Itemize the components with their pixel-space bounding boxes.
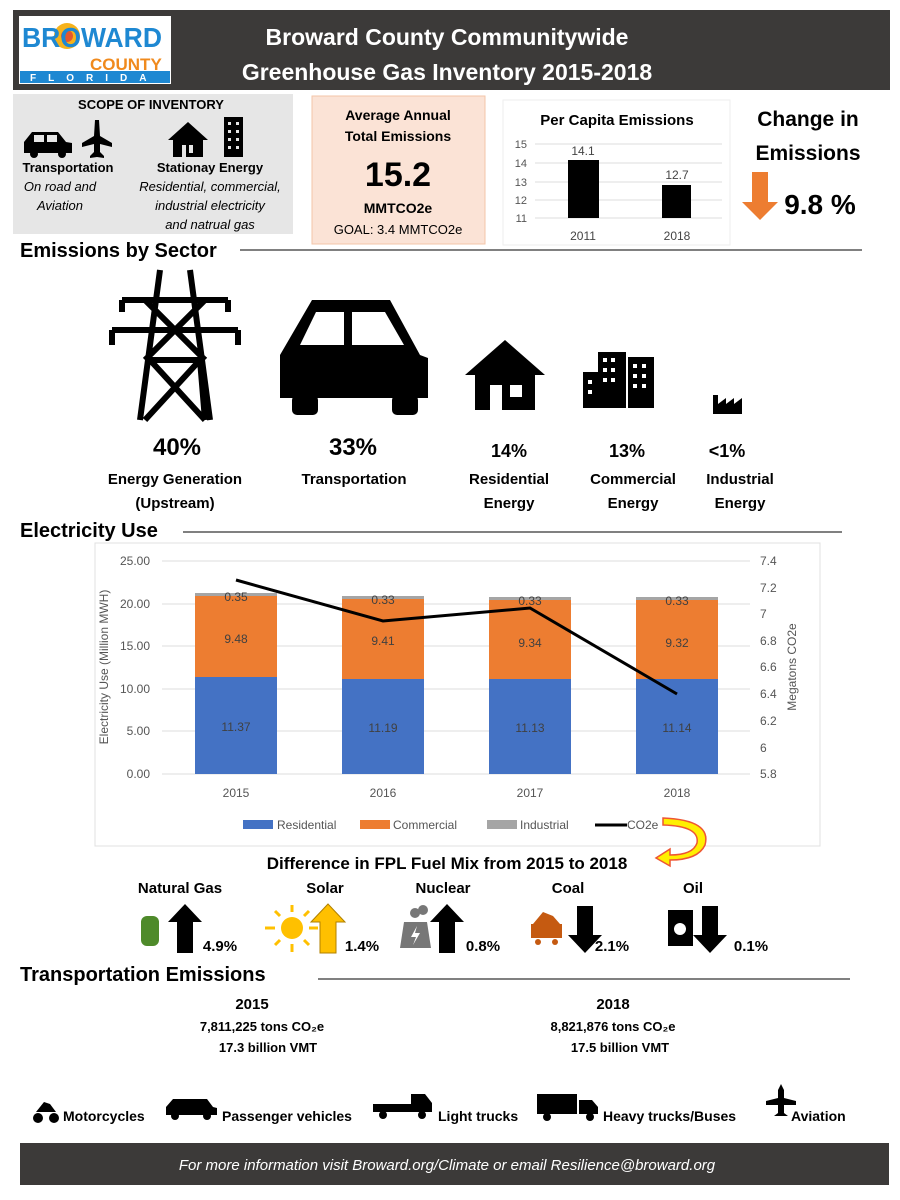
text: 2015 transportation: 17.3 billion VMT: [219, 1040, 317, 1055]
fuel mix items: Solar: [306, 880, 344, 897]
icon: transmission tower: [112, 270, 238, 420]
chart: per capita emissions: 15: [515, 139, 527, 151]
chart: electricity use: 11.19: [368, 721, 398, 735]
chart: electricity use: 9.48: [224, 632, 248, 646]
chart: electricity use: 2018: [664, 786, 691, 800]
text: 2015 transportation: 7,811,225 tons CO₂e: [200, 1019, 324, 1034]
text: 2018 transportation: 17.5 billion VMT: [571, 1040, 669, 1055]
vehicle legend: Heavy trucks/Buses: [603, 1108, 736, 1124]
icon: gas tank: [141, 916, 159, 946]
icon: building: [224, 117, 243, 157]
logo: BROWARD: [22, 22, 162, 53]
logo: FLORIDA: [30, 73, 158, 84]
sector labels: Energy: [608, 495, 659, 512]
sector labels: Industrial: [706, 471, 774, 488]
chart: electricity use: 2015: [223, 786, 250, 800]
chart: electricity use: [95, 543, 820, 846]
sector labels: [108, 434, 774, 512]
icon: motorcycle: [33, 1102, 59, 1123]
vehicle legend: Passenger vehicles: [222, 1108, 352, 1124]
chart: per capita emissions: 2011: [570, 229, 596, 243]
chart: electricity use: 7.4: [760, 554, 777, 568]
logo: COUNTY: [90, 55, 162, 74]
change in emissions: 9.8 %: [784, 189, 856, 220]
chart: electricity use: 0.33: [518, 594, 542, 608]
panel: scope of inventory: SCOPE OF INVENTORY: [78, 97, 224, 112]
vehicle legend: Light trucks: [438, 1108, 518, 1124]
chart: electricity use: 15.00: [120, 639, 150, 653]
chart: electricity use: 6.6: [760, 660, 777, 674]
icon: car: [166, 1099, 217, 1120]
sector labels: Energy: [484, 495, 535, 512]
chart: electricity use: 11.14: [662, 721, 692, 735]
text: 2018 transportation: [550, 996, 676, 1055]
icon: airplane: [766, 1084, 796, 1116]
panel: average annual total emissions: 15.2: [365, 156, 431, 194]
fuel mix items: 0.1%: [734, 938, 768, 955]
chart: per capita emissions: [503, 100, 730, 245]
sector labels: Commercial: [590, 471, 676, 488]
icon: airplane: [82, 120, 112, 158]
icon: sun: [265, 905, 318, 952]
fuel mix items: 4.9%: [203, 938, 237, 955]
chart: per capita emissions: 12.7: [665, 168, 689, 182]
panel: average annual total emissions: Average Annual: [345, 107, 451, 123]
icon: car large: [280, 300, 428, 415]
sector labels: 33%: [329, 434, 377, 461]
chart: electricity use: 2017: [517, 786, 544, 800]
icon: oil barrel: [668, 910, 693, 946]
chart: per capita emissions: 11: [516, 213, 527, 225]
legend: Commercial: [393, 818, 457, 832]
chart: electricity use: 2016: [370, 786, 397, 800]
sector labels: 13%: [609, 441, 645, 461]
chart: electricity use: 5.8: [760, 767, 777, 781]
chart: per capita emissions: Per Capita Emissions: [540, 112, 694, 129]
vehicle legend: Motorcycles: [63, 1108, 145, 1124]
chart: electricity use: 6.2: [760, 714, 777, 728]
panel: scope of inventory: and natrual gas: [165, 217, 255, 232]
icon: buildings: [583, 352, 654, 408]
chart: electricity use: 0.33: [665, 594, 689, 608]
logo: [19, 16, 171, 84]
chart: electricity use: 9.41: [371, 634, 395, 648]
chart: per capita emissions: 12: [515, 195, 527, 207]
legend: CO2e: [627, 818, 659, 832]
bars: [195, 677, 277, 774]
chart: electricity use: 6.4: [760, 687, 777, 701]
sector labels: <1%: [709, 441, 745, 461]
fuel mix items: Oil: [683, 880, 703, 897]
vehicle legend: [33, 1084, 846, 1124]
sector labels: (Upstream): [135, 495, 215, 512]
arrow: curved yellow: [656, 818, 706, 866]
chart: electricity use: 25.00: [120, 554, 150, 568]
heading: transportation emissions: Transportation Emissions: [20, 964, 266, 986]
chart: electricity use: 9.34: [518, 636, 542, 650]
panel: scope of inventory: industrial electricity: [155, 198, 266, 213]
chart: electricity use: Electricity Use (Million MWH): [97, 590, 111, 744]
fuel mix items: Coal: [552, 880, 584, 897]
chart: electricity use: 0.35: [224, 590, 248, 604]
chart: per capita emissions: 2018: [664, 229, 691, 243]
chart: electricity use: 6: [760, 741, 767, 755]
panel: scope of inventory: [13, 94, 293, 234]
fuel mix items: 2.1%: [595, 938, 629, 955]
change in emissions: Emissions: [755, 142, 861, 165]
chart: electricity use: 5.00: [127, 724, 150, 738]
header banner: Greenhouse Gas Inventory 2015-2018: [242, 59, 652, 85]
chart: electricity use: 7.2: [760, 581, 777, 595]
heading: emissions by sector: Emissions by Sector: [20, 240, 217, 262]
icon: house: [168, 122, 208, 157]
chart: per capita emissions: 14: [515, 158, 527, 170]
footer: [20, 1143, 889, 1185]
legend: Residential: [277, 818, 336, 832]
sector labels: Residential: [469, 471, 549, 488]
chart: electricity use: 10.00: [120, 682, 150, 696]
chart: electricity use: Megatons CO2e: [785, 623, 799, 711]
fuel mix items: [138, 880, 768, 955]
chart: electricity use: 0.33: [371, 593, 395, 607]
icon: factory: [713, 395, 742, 414]
icon: light truck: [373, 1094, 432, 1119]
legend: [243, 818, 659, 832]
panel: average annual total emissions: MMTCO2e: [364, 200, 432, 216]
fuel mix items: Natural Gas: [138, 880, 222, 897]
chart: electricity use: 20.00: [120, 597, 150, 611]
legend: Industrial: [520, 818, 569, 832]
heading: FPL fuel mix: Difference in FPL Fuel Mix from 2015 to 2018: [267, 854, 627, 873]
sector labels: 14%: [491, 441, 527, 461]
panel: average annual total emissions: GOAL: 3.4 MMTCO2e: [334, 222, 462, 237]
header banner: [13, 10, 890, 90]
sector labels: 40%: [153, 434, 201, 461]
icon: coal cart: [531, 912, 562, 945]
icon: house: [465, 340, 545, 410]
chart: electricity use: 0.00: [127, 767, 150, 781]
text: 2015 transportation: 2015: [235, 996, 269, 1013]
panel: scope of inventory: Transportation: [22, 160, 114, 175]
panel: scope of inventory: Stationay Energy: [157, 160, 264, 175]
chart: electricity use: 6.8: [760, 634, 777, 648]
sector labels: Energy Generation: [108, 471, 242, 488]
chart: electricity use: 11.37: [221, 720, 251, 734]
icon: nuclear plant: [400, 905, 431, 948]
change in emissions: [742, 108, 861, 220]
icon: heavy truck: [537, 1094, 598, 1121]
panel: scope of inventory: Residential, commercial,: [139, 179, 281, 194]
chart: electricity use: 9.32: [665, 636, 689, 650]
heading: electricity use: Electricity Use: [20, 520, 158, 542]
text: 2018 transportation: 8,821,876 tons CO₂e: [550, 1019, 676, 1034]
panel: average annual total emissions: [312, 96, 485, 244]
panel: scope of inventory: On road and: [24, 179, 97, 194]
panel: scope of inventory: Aviation: [36, 198, 83, 213]
chart: per capita emissions: 14.1: [571, 144, 595, 158]
fuel mix items: 0.8%: [466, 938, 500, 955]
icon: down arrow: [742, 172, 778, 220]
panel: average annual total emissions: Total Emissions: [345, 128, 451, 144]
title: Broward County Communitywide: [266, 24, 628, 50]
chart: per capita emissions: 13: [515, 177, 527, 189]
vehicle legend: Aviation: [791, 1108, 846, 1124]
icon: car: [24, 132, 72, 158]
text: 2018 transportation: 2018: [596, 996, 630, 1013]
sector labels: Transportation: [301, 471, 407, 488]
chart: electricity use: 11.13: [515, 721, 545, 735]
fuel mix items: 1.4%: [345, 938, 379, 955]
chart: electricity use: 7: [760, 607, 767, 621]
fuel mix items: Nuclear: [415, 880, 471, 897]
text: 2015 transportation: [200, 996, 324, 1055]
change in emissions: Change in: [757, 108, 859, 131]
sector labels: Energy: [715, 495, 766, 512]
footer: For more information visit Broward.org/Climate or email Resilience@broward.org: [179, 1157, 716, 1174]
